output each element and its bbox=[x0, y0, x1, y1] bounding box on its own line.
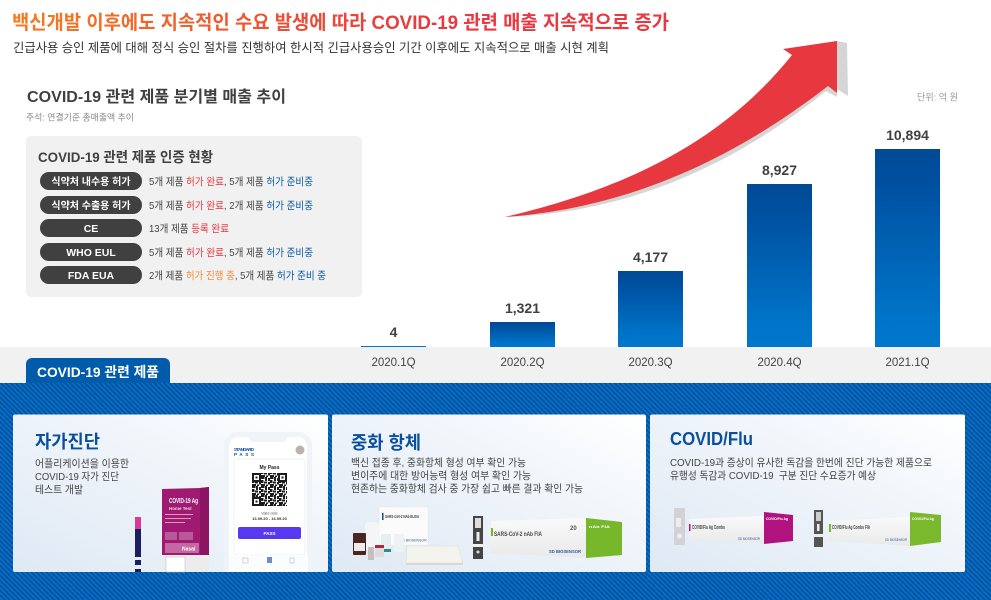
row: WHO EUL bbox=[40, 243, 313, 261]
antibody description: 변이주에 대한 방어능력 형성 여부 확인 가능 bbox=[351, 469, 531, 482]
bar 2020.1Q: 2020.1Q bbox=[371, 357, 416, 369]
icon: ELISA kit: SD BIOSENSOR bbox=[400, 538, 427, 542]
icon: phone app: PASS bbox=[234, 452, 254, 457]
subheading: 긴급사용 승인 제품에 대해 정식 승인 절차를 진행하여 한시적 긴급사용승인 기간 이후에도 지속적으로 매출 시현 계획 bbox=[13, 40, 609, 55]
row: MFDS export: 식약처 수출용 허가 bbox=[51, 199, 131, 212]
row: MFDS domestic: 5개 제품 허가 완료, 5개 제품 허가 준비중 bbox=[149, 175, 313, 188]
arrow: growth bbox=[505, 41, 848, 217]
icon: swab bbox=[135, 517, 141, 572]
row: FDA EUA: 2개 제품 허가 진행 중, 5개 제품 허가 준비 중 bbox=[149, 270, 326, 282]
icon: phone app: My Pass bbox=[259, 465, 280, 471]
bar 2020.1Q: 4 bbox=[390, 324, 398, 340]
icon: combo box magenta: COVID/Flu Ag bbox=[766, 517, 788, 521]
bar 2021.1Q bbox=[875, 127, 940, 369]
icon: nAb FIA box: SARS-CoV-2 nAb FIA bbox=[494, 531, 542, 538]
icon: cassette bbox=[473, 516, 483, 559]
icon: combo FIA box green: COVID/Flu Ag bbox=[912, 517, 934, 521]
covid flu description: 유행성 독감과 COVID-19 구분 진단 수요증가 예상 bbox=[670, 469, 876, 482]
icon: combo cassette bbox=[674, 508, 685, 545]
icon: combo box magenta: COVID/Flu Ag Combo bbox=[692, 525, 725, 531]
icon: phone app: Valid date bbox=[261, 512, 278, 516]
row: CE bbox=[40, 219, 229, 237]
icon: phone app: 13.09.20 - 16.09.20 bbox=[252, 516, 288, 521]
row: FDA EUA: FDA EUA bbox=[68, 270, 115, 282]
bar 2020.3Q: 4,177 bbox=[633, 249, 668, 265]
covid flu description bbox=[670, 457, 932, 482]
bar 2020.2Q bbox=[490, 300, 555, 369]
panel: self test bbox=[13, 414, 328, 572]
icon: combo FIA box green: SD BIOSENSOR bbox=[885, 538, 907, 542]
icon: test kit box: Nasal bbox=[182, 546, 196, 552]
icon: ELISA kit: SARS-CoV-2 NAb ELISA bbox=[385, 514, 419, 519]
row: MFDS export: 5개 제품 허가 완료, 2개 제품 허가 준비중 bbox=[149, 199, 313, 212]
self test description bbox=[35, 458, 129, 496]
icon: combo FIA box green: COVID/Flu Ag Combo FIA bbox=[832, 525, 870, 531]
icon: nAb FIA box: nAb FIA bbox=[589, 524, 610, 529]
icon: combo FIA box green bbox=[829, 512, 941, 546]
self test heading: 자가진단 bbox=[35, 432, 100, 452]
antibody description bbox=[351, 456, 583, 495]
panel: certification status bbox=[26, 136, 362, 297]
icon: nAb FIA box bbox=[491, 518, 622, 558]
bar 2021.1Q: 2021.1Q bbox=[885, 357, 930, 369]
bar chart bbox=[361, 127, 940, 369]
icon: test kit box bbox=[162, 487, 209, 572]
icon: nAb FIA box: 20 bbox=[570, 526, 577, 532]
bar 2020.1Q bbox=[361, 324, 426, 369]
self test description: 어플리케이션을 이용한 bbox=[35, 458, 129, 470]
bar 2020.4Q: 8,927 bbox=[762, 162, 797, 178]
bar 2020.3Q bbox=[618, 249, 683, 369]
icon: combo box magenta bbox=[689, 512, 793, 544]
QR code bbox=[252, 473, 287, 506]
icon: combo box magenta: SD BIOSENSOR bbox=[738, 537, 760, 541]
icon: phone app: STANDARD bbox=[234, 447, 255, 452]
row: MFDS domestic bbox=[40, 172, 313, 190]
icon: phone app: PASS bbox=[264, 531, 275, 536]
row: CE: CE bbox=[84, 223, 98, 235]
chart note: 주석: 연결기준 총매출액 추이 bbox=[26, 112, 134, 122]
icon: ELISA kit bbox=[353, 507, 463, 565]
icon: nAb FIA box: SD BIOSENSOR bbox=[549, 549, 582, 554]
icon: test kit box: Home Test bbox=[169, 506, 192, 511]
row: MFDS domestic: 식약처 내수용 허가 bbox=[51, 175, 131, 188]
section tab: COVID-19 관련 제품 bbox=[37, 364, 159, 380]
gray axis band bbox=[0, 347, 991, 383]
chart title: COVID-19 관련 제품 분기별 매출 추이 bbox=[27, 88, 286, 106]
row: WHO EUL: 5개 제품 허가 완료, 5개 제품 허가 준비중 bbox=[149, 246, 313, 259]
bar 2020.2Q: 1,321 bbox=[505, 300, 540, 316]
section tab bbox=[26, 358, 170, 383]
panel: covid flu bbox=[650, 414, 965, 572]
self test description: 테스트 개발 bbox=[35, 484, 83, 496]
icon: test kit box: COVID-19 Ag bbox=[169, 498, 198, 505]
covid flu heading: COVID/Flu bbox=[670, 429, 753, 449]
panel: neutralizing antibody bbox=[332, 414, 646, 572]
self test description: COVID-19 자가 진단 bbox=[35, 471, 119, 483]
covid flu description: COVID-19과 증상이 유사한 독감을 한번에 진단 가능한 제품으로 bbox=[670, 457, 932, 469]
bar 2020.4Q bbox=[747, 162, 812, 369]
blue hatched section background bbox=[0, 383, 991, 600]
bar 2021.1Q: 10,894 bbox=[886, 127, 929, 143]
unit label: 단위: 억 원 bbox=[917, 92, 958, 104]
bar 2020.2Q: 2020.2Q bbox=[500, 357, 545, 369]
headline: 백신개발 이후에도 지속적인 수요 발생에 따라 COVID-19 관련 매출 지속적으로 증가 bbox=[12, 12, 669, 34]
bar 2020.4Q: 2020.4Q bbox=[757, 357, 802, 369]
row: WHO EUL: WHO EUL bbox=[66, 247, 116, 259]
row: MFDS export bbox=[40, 196, 313, 214]
row: CE: 13개 제품 등록 완료 bbox=[149, 222, 229, 235]
bar 2020.3Q: 2020.3Q bbox=[628, 357, 673, 369]
antibody heading: 중화 항체 bbox=[351, 433, 421, 453]
antibody description: 현존하는 중화항체 검사 중 가장 쉽고 빠른 결과 확인 가능 bbox=[351, 482, 583, 495]
icon: combo cassette dark bbox=[814, 510, 823, 547]
icon: phone app bbox=[224, 432, 312, 572]
certification heading: COVID-19 관련 제품 인증 현황 bbox=[38, 149, 213, 165]
row: FDA EUA bbox=[40, 266, 326, 284]
antibody description: 백신 접종 후, 중화항체 형성 여부 확인 가능 bbox=[351, 456, 526, 469]
